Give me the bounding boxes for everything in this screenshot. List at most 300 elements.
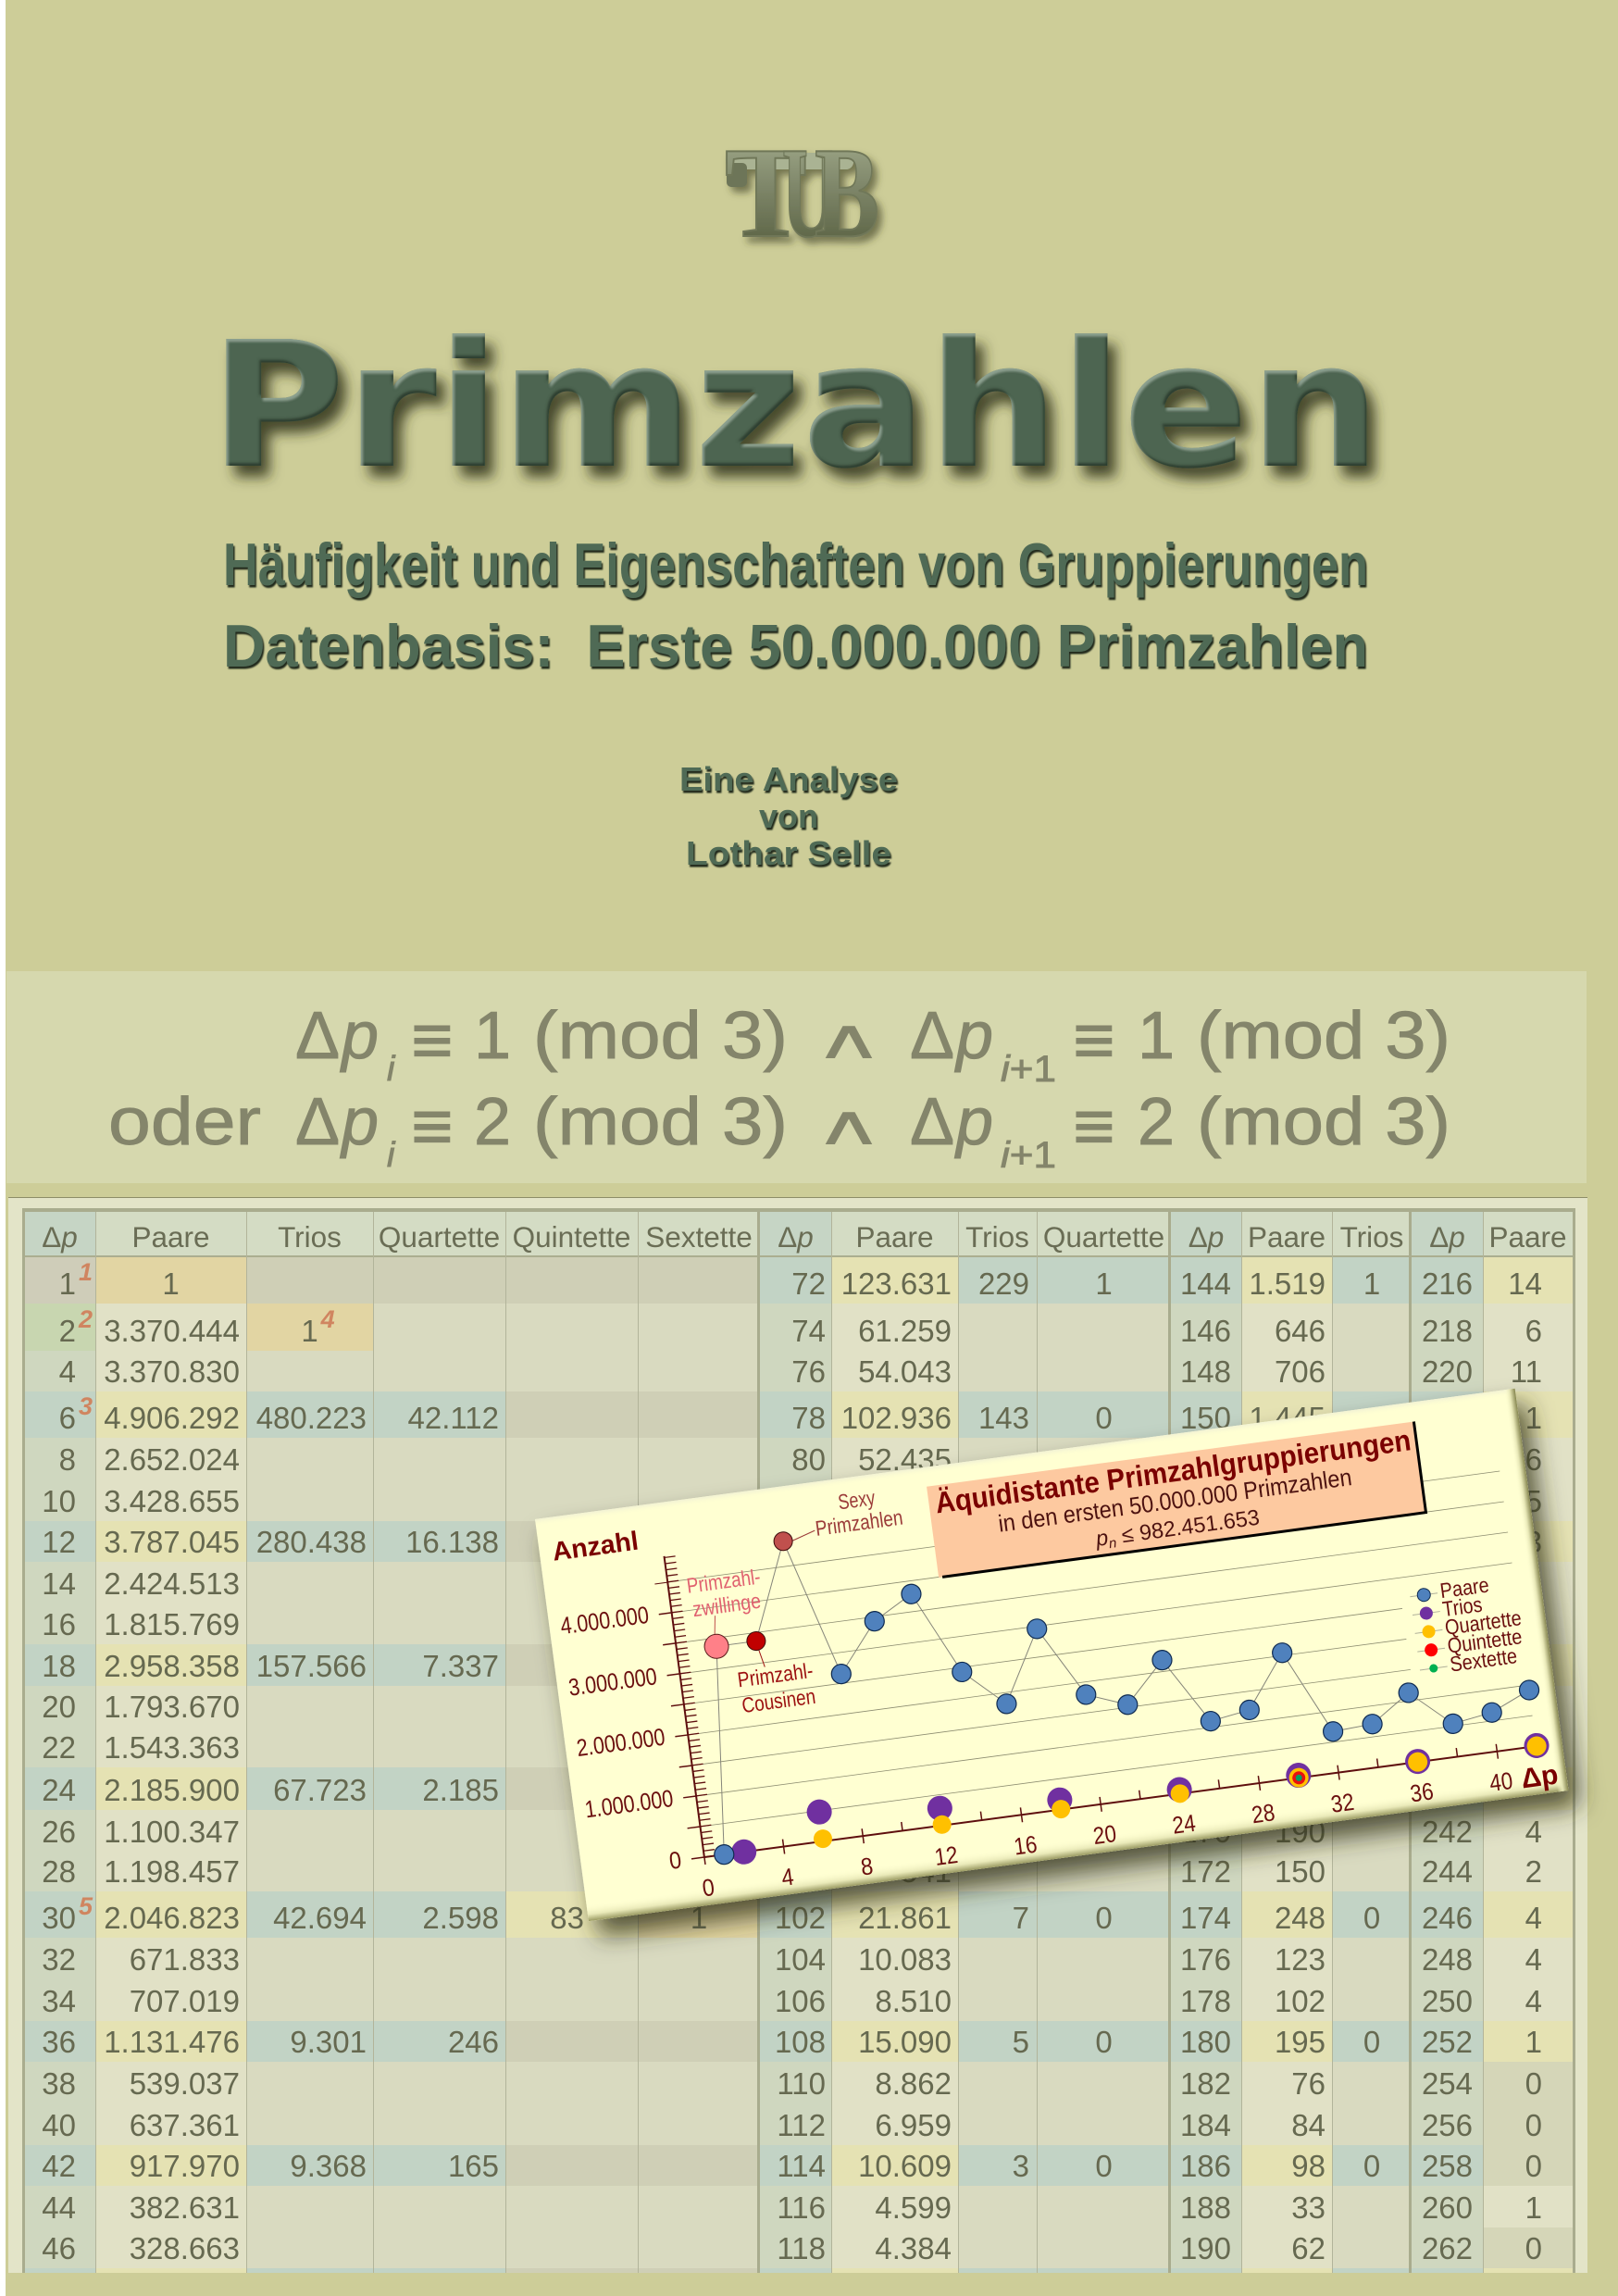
data table: 146	[1180, 1314, 1231, 1348]
data table: 917.970	[130, 2149, 240, 2183]
data table: 14	[1508, 1267, 1542, 1301]
data table: 188	[1180, 2190, 1231, 2225]
data table: 0	[1363, 2025, 1380, 2059]
annotation: Sexy Primzahlen	[786, 1482, 904, 1543]
data table: 1	[301, 1314, 318, 1348]
panel: formula band	[6, 971, 1587, 1183]
formula: ≡	[1073, 999, 1115, 1080]
formula: (mod 3)	[1197, 999, 1450, 1073]
data table: 248	[1275, 1901, 1326, 1935]
y axis labels	[559, 1601, 683, 1885]
data table: 1	[1095, 1267, 1113, 1301]
panel: table sheet	[8, 1197, 1587, 2273]
data table: 190	[1275, 1815, 1326, 1849]
data table: 98	[791, 1815, 826, 1849]
data table: 4	[59, 1354, 76, 1389]
formula: Δ	[295, 1085, 340, 1159]
data table: 4	[1525, 1815, 1542, 1849]
data table: 6	[1525, 1314, 1542, 1348]
data table: 33	[1291, 2190, 1326, 2225]
formula: 2	[1138, 1085, 1175, 1159]
data table: 38	[42, 2066, 76, 2101]
marker: Cousinen	[746, 1630, 766, 1652]
data table: 6	[59, 1401, 76, 1435]
data table: 6.959	[875, 2108, 952, 2142]
data table: 15.090	[858, 2025, 952, 2059]
data table: 2.424.513	[104, 1566, 240, 1601]
x axis labels: 0	[701, 1873, 716, 1902]
data table: 18	[42, 1649, 76, 1683]
x axis labels: 4	[779, 1863, 795, 1891]
x axis	[703, 1741, 1537, 1857]
data table: 706	[1275, 1354, 1326, 1389]
formula: ∧	[813, 1093, 885, 1158]
data table: 16	[42, 1607, 76, 1641]
y axis labels: 0	[667, 1845, 683, 1875]
series: Paare markers	[682, 1504, 1548, 1866]
x axis labels: 32	[1329, 1788, 1356, 1818]
author credit: Eine Analyse	[679, 760, 898, 798]
data table: 0	[1525, 2149, 1542, 2183]
data table: 480.223	[256, 1401, 367, 1435]
data table: 34	[42, 1984, 76, 2018]
data table: 174	[1180, 1901, 1231, 1935]
data table: 40	[42, 2108, 76, 2142]
y axis labels: 2.000.000	[575, 1723, 666, 1762]
data table: 102	[1275, 1984, 1326, 2018]
data table: Δp	[1429, 1220, 1465, 1254]
series: Quintette and Sextette markers	[1291, 1770, 1306, 1785]
marker: Sexy Primzahlen	[773, 1531, 793, 1552]
data table: 0	[1525, 2108, 1542, 2142]
data table: 11	[1511, 1354, 1542, 1389]
data table: 61.259	[858, 1314, 952, 1348]
data table: 30	[42, 1901, 76, 1935]
data table: 165	[448, 2149, 499, 2183]
data table: 1	[1363, 1267, 1380, 1301]
y axis labels: 4.000.000	[559, 1601, 651, 1640]
data table: 52.435	[858, 1442, 952, 1477]
data table: 229	[978, 1267, 1029, 1301]
legend: Sextette	[1449, 1643, 1518, 1677]
data table: 90	[791, 1649, 826, 1683]
data table: 4.384	[875, 2231, 952, 2265]
data table: 78	[791, 1401, 826, 1435]
data table: 180	[1180, 2025, 1231, 2059]
data table: 3.787.045	[104, 1525, 240, 1559]
data table: 1.519	[1249, 1267, 1326, 1301]
data table: 10.609	[858, 2149, 952, 2183]
data table: 2.652.024	[104, 1442, 240, 1477]
data table: 1.815.769	[104, 1607, 240, 1641]
x axis labels: 16	[1012, 1829, 1039, 1861]
data table: 246	[448, 2025, 499, 2059]
data table: Paare	[1488, 1220, 1567, 1254]
title box: Äquidistante Primzahlgruppierungen	[933, 1423, 1413, 1519]
data table: Quartette	[379, 1220, 500, 1254]
formula: 1	[474, 999, 511, 1073]
data table: 1	[59, 1267, 76, 1301]
data table: 172	[1180, 1854, 1231, 1889]
data table: 32	[42, 1942, 76, 1977]
data table: 5	[1525, 1484, 1542, 1518]
data table: 2.958.358	[104, 1649, 240, 1683]
data table: 328.663	[130, 2231, 240, 2265]
logo: TUB	[725, 120, 879, 265]
title: Primzahlen	[209, 305, 1381, 507]
data table: 158	[1180, 1566, 1231, 1601]
data table: 2	[79, 1305, 93, 1333]
author credit: Lothar Selle	[686, 834, 891, 872]
data table: 195	[1275, 2025, 1326, 2059]
data table: 382.631	[130, 2190, 240, 2225]
x axis labels: 40	[1487, 1766, 1514, 1797]
data table: Sextette	[645, 1220, 753, 1254]
data table: 164	[1180, 1690, 1231, 1724]
data table: 258	[1422, 2149, 1473, 2183]
subtitle	[223, 530, 1368, 680]
data table: 62	[1291, 2231, 1326, 2265]
series: Trios markers	[726, 1703, 1550, 1866]
data table: 150	[1275, 1854, 1326, 1889]
formula: i	[387, 1050, 396, 1089]
data table: 5	[79, 1892, 93, 1920]
data table: 100	[775, 1854, 826, 1889]
data table: 74	[791, 1314, 826, 1348]
data table: 21.861	[858, 1901, 952, 1935]
data table: Δp	[1189, 1220, 1224, 1254]
x axis labels: 12	[933, 1841, 960, 1871]
series: Paare line	[684, 1446, 1537, 1854]
data table: 108	[775, 2025, 826, 2059]
marker: Primzahlzwillinge	[703, 1633, 730, 1660]
data table: 14	[42, 1566, 76, 1601]
data table: 280.438	[256, 1525, 367, 1559]
data table: 1.198.457	[104, 1854, 240, 1889]
data table: 637.361	[130, 2108, 240, 2142]
data table: 4	[321, 1305, 335, 1333]
data table: 166	[1180, 1730, 1231, 1765]
data table: 9.368	[290, 2149, 367, 2183]
data table: 671.833	[130, 1942, 240, 1977]
formula	[108, 999, 1450, 1176]
annotation: Primzahl-Cousinen: Cousinen	[741, 1684, 817, 1717]
data table: 24	[42, 1773, 76, 1807]
data table: 1.131.476	[104, 2025, 240, 2059]
logo: TUB: T	[725, 120, 807, 265]
x axis labels: 28	[1250, 1798, 1276, 1828]
data table: 2.185	[422, 1773, 499, 1807]
data table: 1.543.363	[104, 1730, 240, 1765]
data table: 96	[791, 1773, 826, 1807]
data table: 2.185.900	[104, 1773, 240, 1807]
formula: (mod 3)	[533, 1085, 788, 1159]
data table: 236	[1422, 1690, 1473, 1724]
title box: n	[1108, 1535, 1117, 1552]
data table: 46	[42, 2231, 76, 2265]
data table: 102.936	[841, 1401, 952, 1435]
data table: 220	[1422, 1354, 1473, 1389]
data table: 226	[1422, 1484, 1473, 1518]
card background	[535, 1389, 1569, 1921]
data table: 76	[1291, 2066, 1326, 2101]
data table: 106	[775, 1984, 826, 2018]
data table: 0	[1363, 1901, 1380, 1935]
data table: 168	[1180, 1773, 1231, 1807]
formula: 2	[474, 1085, 511, 1159]
data table: 1	[691, 1901, 707, 1935]
data table: 114	[777, 2149, 826, 2183]
data table: 539.037	[130, 2066, 240, 2101]
subtitle: Datenbasis: Erste 50.000.000 Primzahlen	[223, 612, 1368, 680]
data table: 112	[777, 2108, 826, 2142]
data table: 86	[791, 1566, 826, 1601]
data table: 186	[1180, 2149, 1231, 2183]
data table: 190	[1180, 2231, 1231, 2265]
title box	[927, 1422, 1425, 1578]
data table: Trios	[278, 1220, 342, 1254]
series: Quartette markers	[813, 1733, 1548, 1853]
data table: 3	[1013, 2149, 1029, 2183]
data table: 0	[1095, 1401, 1113, 1435]
data table: 0	[1525, 2231, 1542, 2265]
data table: 228	[1422, 1525, 1473, 1559]
formula: p	[954, 1085, 993, 1159]
data table: 8.510	[875, 1984, 952, 2018]
formula: i+1	[1001, 1049, 1056, 1090]
data table: 256	[1422, 2108, 1473, 2142]
data table: 707.019	[130, 1984, 240, 2018]
data table: 646	[1275, 1314, 1326, 1348]
data table: 230	[1422, 1566, 1473, 1601]
data table: 1	[79, 1258, 93, 1286]
data table: Trios	[965, 1220, 1029, 1254]
data table: 102	[775, 1901, 826, 1935]
data table: 67.723	[273, 1773, 367, 1807]
formula: Δ	[910, 1085, 954, 1159]
data table: 110	[777, 2066, 826, 2101]
data table	[25, 1212, 1573, 2273]
data table: 1	[162, 1267, 180, 1301]
data table: 246	[1422, 1901, 1473, 1935]
data table: 10	[42, 1484, 76, 1518]
data table: 148	[1180, 1354, 1231, 1389]
data table: Paare	[131, 1220, 210, 1254]
data table: 152	[1180, 1442, 1231, 1477]
data table: 232	[1422, 1607, 1473, 1641]
data table: 0	[1363, 2149, 1380, 2183]
data table: 92	[791, 1690, 826, 1724]
title box: p	[1093, 1525, 1110, 1551]
data table: 84	[791, 1525, 826, 1559]
data table: 2	[59, 1314, 76, 1348]
data table: 42.694	[273, 1901, 367, 1935]
data table: Quintette	[513, 1220, 630, 1254]
data table: 104	[775, 1942, 826, 1977]
data table: 28	[42, 1854, 76, 1889]
data table: 7	[1013, 1901, 1029, 1935]
data table: 178	[1180, 1984, 1231, 2018]
data table: 260	[1422, 2190, 1473, 2225]
data table: 3.370.444	[104, 1314, 240, 1348]
data table: Δp	[778, 1220, 814, 1254]
data table: 262	[1422, 2231, 1473, 2265]
data table: 4.599	[875, 2190, 952, 2225]
data table: Quartette	[1043, 1220, 1164, 1254]
data table: 76	[791, 1354, 826, 1389]
data table: 54.043	[858, 1354, 952, 1389]
data table: 6	[1525, 1442, 1542, 1477]
data table: 242	[1422, 1815, 1473, 1849]
data table: 26	[42, 1815, 76, 1849]
data table: 254	[1422, 2066, 1473, 2101]
data table: 184	[1180, 2108, 1231, 2142]
formula: 1	[1138, 999, 1175, 1073]
formula: ≡	[411, 999, 454, 1080]
data table: 94	[791, 1730, 826, 1765]
data table: 244	[1422, 1854, 1473, 1889]
data table: 9.301	[290, 2025, 367, 2059]
data table: 144	[1180, 1267, 1231, 1301]
data table: 162	[1180, 1649, 1231, 1683]
formula: p	[340, 1085, 379, 1159]
data table: Paare	[855, 1220, 934, 1254]
data table: 157.566	[256, 1649, 367, 1683]
y axis labels: 1.000.000	[583, 1784, 675, 1823]
annotation: Primzahlzwillinge: zwillinge	[691, 1589, 762, 1621]
annotation: Primzahlzwillinge	[685, 1564, 767, 1637]
annotation: Primzahl-Cousinen: Primzahl-	[736, 1658, 815, 1691]
axis title: Anzahl: Anzahl	[551, 1527, 641, 1567]
data table: 36	[42, 2025, 76, 2059]
data table: 1.100.347	[104, 1815, 240, 1849]
formula: p	[954, 999, 993, 1073]
data table: 143	[978, 1401, 1029, 1435]
data table: 2	[1525, 1854, 1542, 1889]
logo: TUB: B	[815, 121, 879, 265]
x axis labels: 8	[859, 1852, 875, 1881]
data table: 8.862	[875, 2066, 952, 2101]
data table: 252	[1422, 2025, 1473, 2059]
data table: 22	[42, 1730, 76, 1765]
data table: 118	[777, 2231, 826, 2265]
data table: 156	[1180, 1525, 1231, 1559]
chart card	[535, 1389, 1569, 1921]
legend: Trios	[1441, 1592, 1484, 1621]
data table: 1.445	[1249, 1401, 1326, 1435]
data table: 42	[42, 2149, 76, 2183]
formula: ≡	[1073, 1085, 1115, 1167]
data table: 123.631	[841, 1267, 952, 1301]
data table: 1	[1525, 2190, 1542, 2225]
data table: 4.906.292	[104, 1401, 240, 1435]
data table: 3.428.655	[104, 1484, 240, 1518]
x axis labels: 20	[1091, 1819, 1118, 1850]
data table: 218	[1422, 1314, 1473, 1348]
y axis	[658, 1555, 710, 1859]
data table: 82	[791, 1484, 826, 1518]
data table: 0	[1525, 2066, 1542, 2101]
x axis labels: 24	[1171, 1809, 1197, 1840]
data table: 4	[1525, 1942, 1542, 1977]
data table: 2.598	[422, 1901, 499, 1935]
data table: 10.083	[858, 1942, 952, 1977]
data table: 20	[42, 1690, 76, 1724]
data table: 0	[1095, 2149, 1113, 2183]
data table: 4	[1525, 1901, 1542, 1935]
data table: 8	[59, 1442, 76, 1477]
data table: 116	[777, 2190, 826, 2225]
data table: 238	[1422, 1730, 1473, 1765]
data table: 4	[1525, 1984, 1542, 2018]
logo: TUB: U	[782, 121, 834, 265]
data table: 1	[1525, 2025, 1542, 2059]
formula: ≡	[411, 1085, 454, 1167]
data table: 2.046.823	[104, 1901, 240, 1935]
subtitle: Häufigkeit und Eigenschaften von Gruppierungen	[223, 530, 1368, 598]
data table: 16.138	[405, 1525, 499, 1559]
data table: 176	[1180, 1942, 1231, 1977]
data table: 3.370.830	[104, 1354, 240, 1389]
y axis labels: 3.000.000	[566, 1662, 659, 1702]
formula: Δ	[295, 999, 340, 1073]
data table: 98	[1291, 2149, 1326, 2183]
data table: 170	[1180, 1815, 1231, 1849]
formula: Δ	[910, 999, 954, 1073]
data table: 1.793.670	[104, 1690, 240, 1724]
data table: 5	[1013, 2025, 1029, 2059]
data table: 3	[79, 1392, 93, 1420]
annotation: Primzahlzwillinge: Primzahl-	[685, 1564, 762, 1598]
data table: 83	[550, 1901, 584, 1935]
data table: Paare	[1248, 1220, 1326, 1254]
formula: (mod 3)	[1197, 1085, 1450, 1159]
legend: Quartette	[1443, 1605, 1523, 1640]
data table: 123	[1275, 1942, 1326, 1977]
data table: 224	[1422, 1442, 1473, 1477]
data table: 12	[42, 1525, 76, 1559]
data table: 216	[1422, 1267, 1473, 1301]
data table: 250	[1422, 1984, 1473, 2018]
data table: 44	[42, 2190, 76, 2225]
data table: 84	[1291, 2108, 1326, 2142]
axis title: delta p: Δp	[1519, 1759, 1560, 1794]
data table: 160	[1180, 1607, 1231, 1641]
legend: Quintette	[1446, 1624, 1524, 1658]
x axis labels: 36	[1409, 1777, 1435, 1807]
x axis labels	[701, 1766, 1514, 1902]
annotation: Primzahl-Cousinen	[734, 1643, 818, 1717]
data table: 0	[1095, 2025, 1113, 2059]
data table: 234	[1422, 1649, 1473, 1683]
data table: 80	[791, 1442, 826, 1477]
legend: Paare	[1438, 1572, 1490, 1603]
data table: 42.112	[408, 1401, 499, 1435]
formula: (mod 3)	[533, 999, 788, 1073]
data table: 248	[1422, 1942, 1473, 1977]
data table: 1	[1525, 1401, 1542, 1435]
data table: 182	[1180, 2066, 1231, 2101]
formula: i+1	[1001, 1135, 1056, 1176]
data table: 0	[1095, 1901, 1113, 1935]
annotation: Sexy Primzahlen: Sexy	[837, 1485, 877, 1514]
title box: ≤ 982.451.653	[1114, 1505, 1261, 1548]
data table: 88	[791, 1607, 826, 1641]
data table: 240	[1422, 1773, 1473, 1807]
formula: oder	[108, 1085, 261, 1159]
formula: ∧	[813, 1007, 885, 1072]
data table: 7.337	[422, 1649, 499, 1683]
